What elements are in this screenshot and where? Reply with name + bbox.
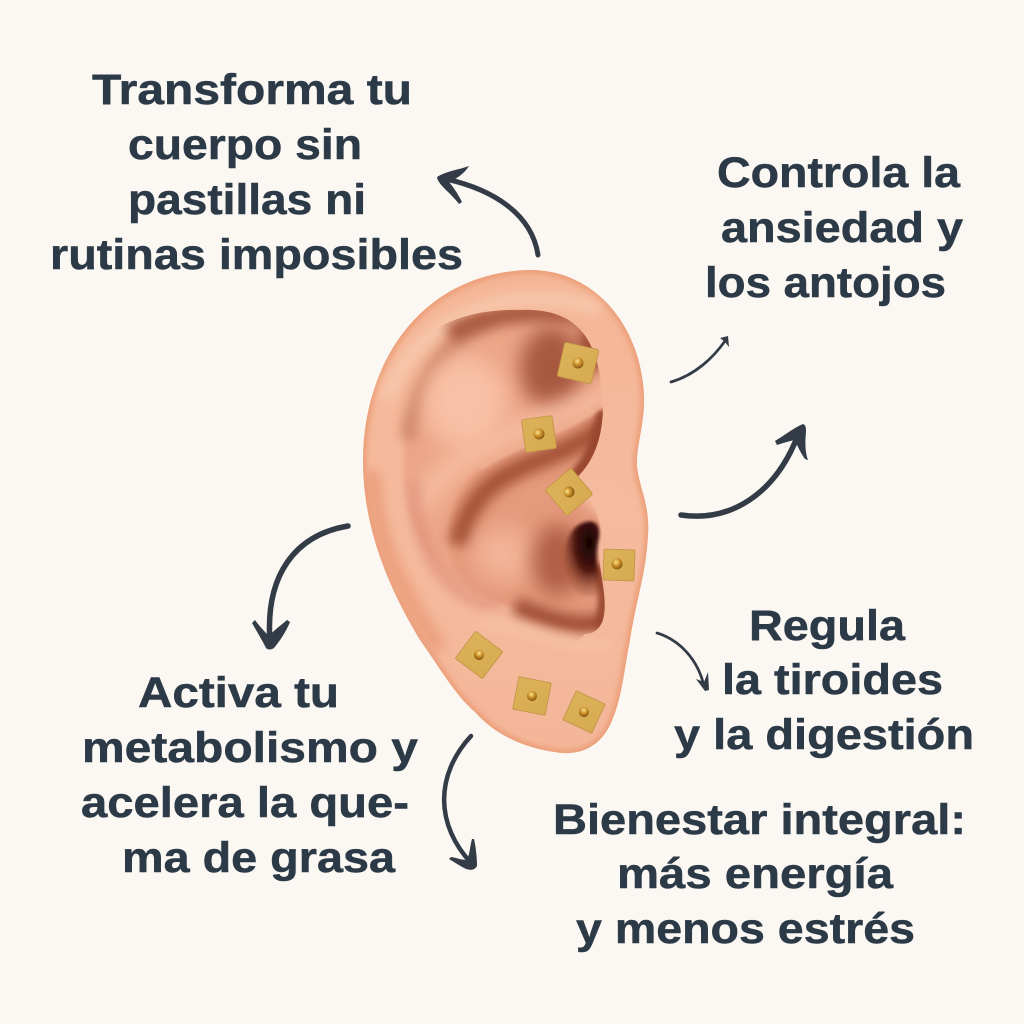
soft bowl tone (402, 322, 600, 589)
text: activa tu metabolismo: Activa tu (138, 669, 339, 717)
gold patch 5 (455, 631, 503, 679)
fold highlight (480, 405, 603, 468)
ear canal (565, 521, 604, 597)
fold shadow (458, 425, 605, 545)
text: controla la ansiedad: ansiedad y (721, 204, 963, 252)
crus light (582, 498, 596, 514)
gold patch 1 (557, 342, 599, 384)
arrow: thin to top-right text (671, 336, 729, 382)
text: regula la tiroides: Regula (749, 602, 906, 650)
gold patch 3 (545, 468, 593, 516)
gold patch 2 (521, 416, 557, 452)
arrow: large to top-right text (681, 424, 808, 516)
arrow: to lower-left text (252, 526, 348, 650)
concha bottom shadow (515, 606, 606, 625)
canal side shadow (532, 524, 584, 596)
arrow: to bottom text (444, 736, 477, 870)
text: regula la tiroides (674, 602, 974, 759)
text: transforma tu cuerpo (50, 66, 463, 279)
ear shading (363, 270, 648, 753)
concha light (473, 527, 537, 583)
text: transforma tu cuerpo: pastillas ni (128, 176, 366, 224)
text: activa tu metabolismo (81, 669, 418, 882)
left arc soft shadow (408, 320, 490, 440)
ear base shape (363, 270, 648, 753)
arrow: thin to lower-right text (657, 633, 709, 691)
text: controla la ansiedad (705, 149, 963, 307)
text: controla la ansiedad: Controla la (717, 149, 961, 197)
arrow: to top-left text (437, 166, 538, 255)
ear illustration (363, 270, 648, 753)
text: transforma tu cuerpo: rutinas imposibles (50, 231, 463, 279)
text: bienestar integral: más energía (617, 850, 894, 898)
text: activa tu metabolismo: ma de grasa (122, 834, 396, 882)
gold patch 6 (513, 677, 551, 715)
text: regula la tiroides: y la digestión (674, 711, 974, 759)
antihelix lower shadow (414, 480, 500, 606)
concha fill under fold (452, 415, 600, 612)
gold patch 4 (603, 549, 635, 581)
text: activa tu metabolismo: acelera la que- (81, 779, 409, 827)
top arc shadow (450, 312, 610, 335)
text: controla la ansiedad: los antojos (705, 259, 946, 307)
text: bienestar integral: Bienestar integral: (553, 796, 966, 844)
text: bienestar integral: y menos estrés (576, 905, 915, 953)
text: activa tu metabolismo: metabolismo y (82, 724, 418, 772)
text: transforma tu cuerpo: Transforma tu (92, 66, 412, 114)
antihelix light (423, 356, 507, 448)
text: regula la tiroides: la tiroides (722, 656, 943, 704)
gold patch 7 (563, 691, 605, 733)
text: transforma tu cuerpo: cuerpo sin (128, 121, 362, 169)
text: bienestar integral (553, 796, 966, 953)
lobe crease (510, 619, 584, 644)
cymba shadow (520, 326, 584, 410)
